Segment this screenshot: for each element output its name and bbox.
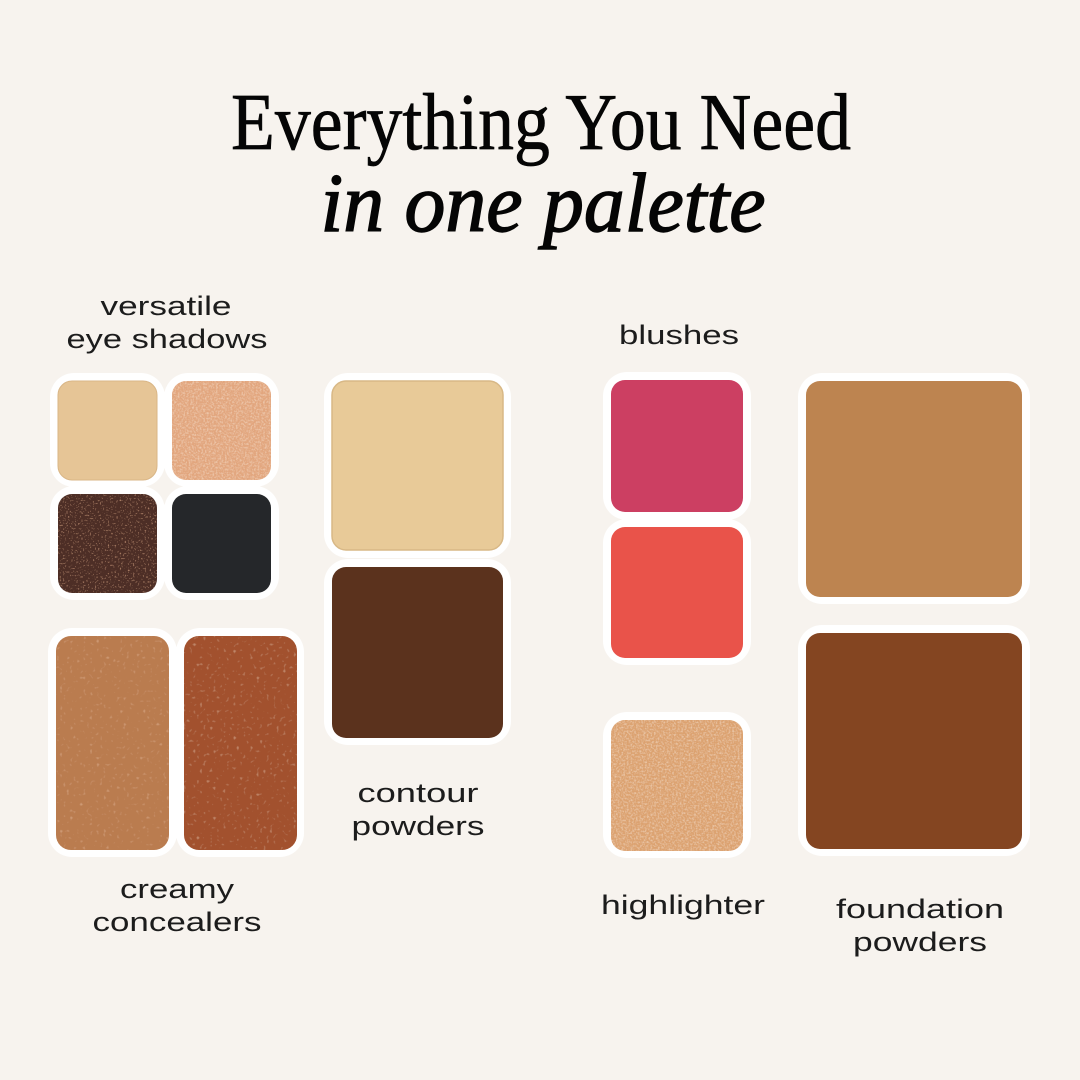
label: versatile eye shadows: versatile (100, 291, 232, 321)
foundation: dark (798, 625, 1030, 856)
eye shadow: brown shimmer (50, 486, 165, 600)
eye shadow: peach shimmer (164, 373, 279, 487)
blush: pink (603, 372, 751, 520)
concealer: light (48, 628, 177, 857)
eye shadow quad (50, 373, 279, 600)
blushes (603, 372, 751, 665)
label: versatile eye shadows: eye shadows (66, 324, 268, 354)
label: creamy concealers: concealers (92, 907, 262, 937)
contour powders (324, 373, 511, 745)
eye shadow: beige (50, 373, 165, 487)
label: foundation powders: powders (853, 927, 987, 957)
eye shadow: black (164, 486, 279, 600)
label: contour powders: contour (358, 778, 479, 808)
blush: coral (603, 519, 751, 665)
label: foundation powders: foundation (836, 894, 1004, 924)
contour: light (324, 373, 511, 558)
subtitle script: in one palette (320, 157, 766, 250)
label: contour powders: powders (352, 811, 484, 841)
label: creamy concealers: creamy (120, 874, 235, 904)
highlighter (603, 712, 751, 858)
concealer: dark (176, 628, 304, 857)
title: Everything You Need (231, 79, 851, 167)
label: blushes: blushes (619, 320, 739, 350)
label: highlighter: highlighter (601, 890, 765, 920)
foundation powders (798, 373, 1030, 856)
foundation: light (798, 373, 1030, 604)
contour: dark (324, 559, 511, 745)
concealer pair (48, 628, 304, 857)
